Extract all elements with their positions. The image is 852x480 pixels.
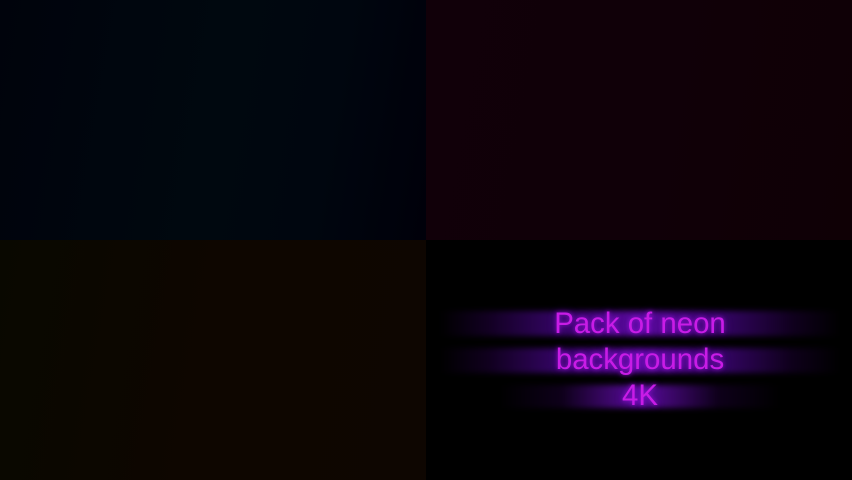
title line: Pack of neon: Pack of neon: [554, 307, 726, 340]
title line: backgrounds: backgrounds: [556, 343, 724, 376]
glow band: first line: [440, 311, 840, 336]
panel: top-left dark blue background: [0, 0, 426, 240]
glow band: third line: [500, 385, 780, 408]
panel: bottom-left dark amber background: [0, 240, 426, 480]
panel: top-right dark magenta background: [426, 0, 852, 240]
title line: 4K: 4K: [622, 379, 658, 412]
glow band: second line: [440, 348, 840, 373]
panel: bottom-right neon title on black: [426, 240, 852, 480]
